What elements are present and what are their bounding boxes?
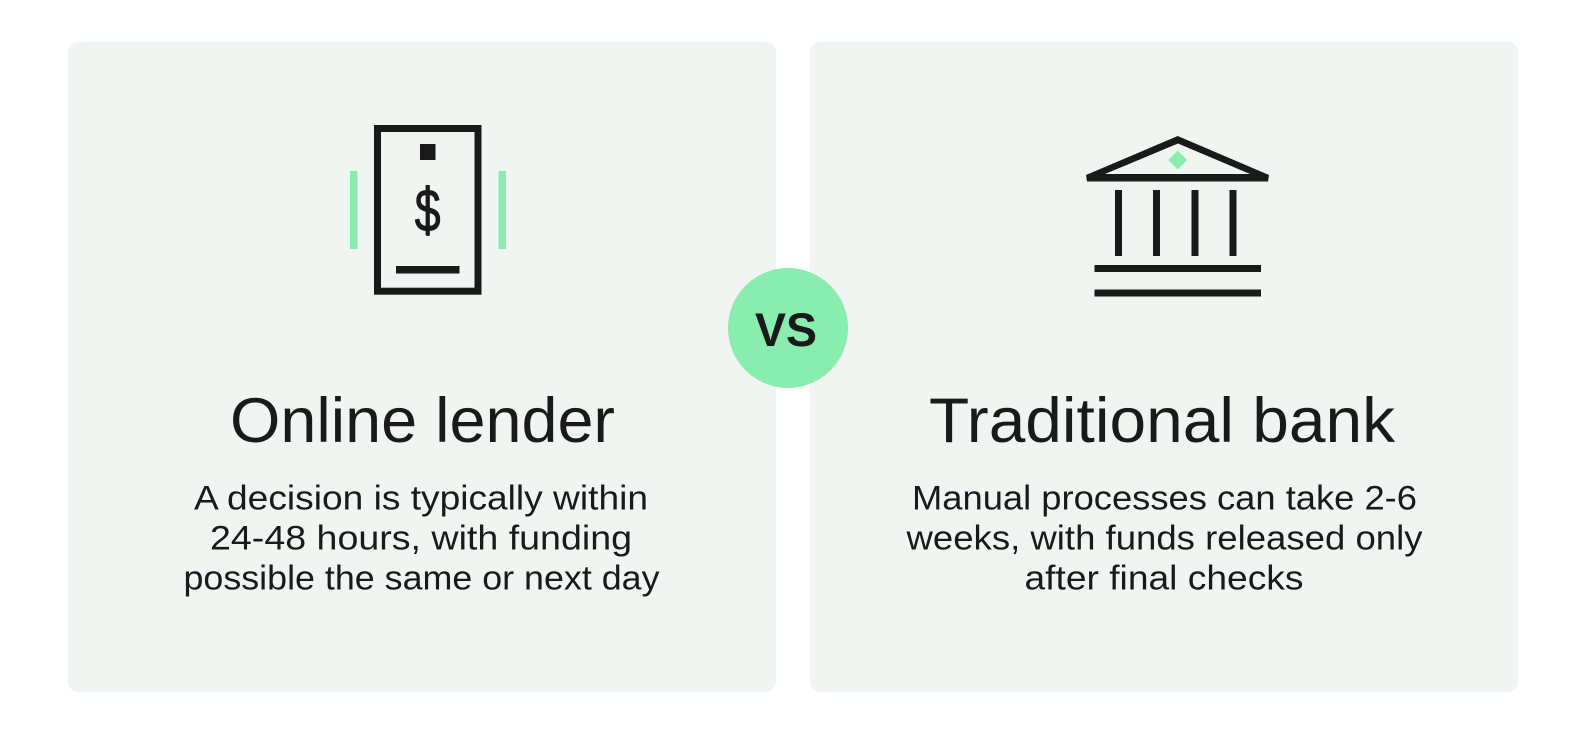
icon: bank building [1086, 136, 1269, 296]
badge: vs: VS [755, 303, 817, 356]
text block: online lender description [184, 480, 660, 598]
icon: phone with dollar sign [350, 128, 506, 291]
badge: vs [728, 268, 848, 388]
text block: traditional bank description [905, 480, 1422, 598]
text block: online lender description: A decision is typically within [194, 480, 648, 518]
heading: online lender: Online lender [230, 386, 615, 456]
text block: online lender description: 24-48 hours, with funding [210, 520, 632, 558]
text block: traditional bank description: Manual processes can take 2-6 [912, 480, 1417, 518]
text block: traditional bank description: weeks, with funds released only [905, 520, 1422, 558]
icon: phone with dollar sign: $ [415, 177, 441, 244]
text block: traditional bank description: after final checks [1024, 560, 1304, 598]
panel: traditional bank [810, 42, 1518, 692]
panel: online lender [68, 42, 776, 692]
text block: online lender description: possible the same or next day [184, 560, 660, 598]
heading: traditional bank: Traditional bank [929, 386, 1396, 456]
